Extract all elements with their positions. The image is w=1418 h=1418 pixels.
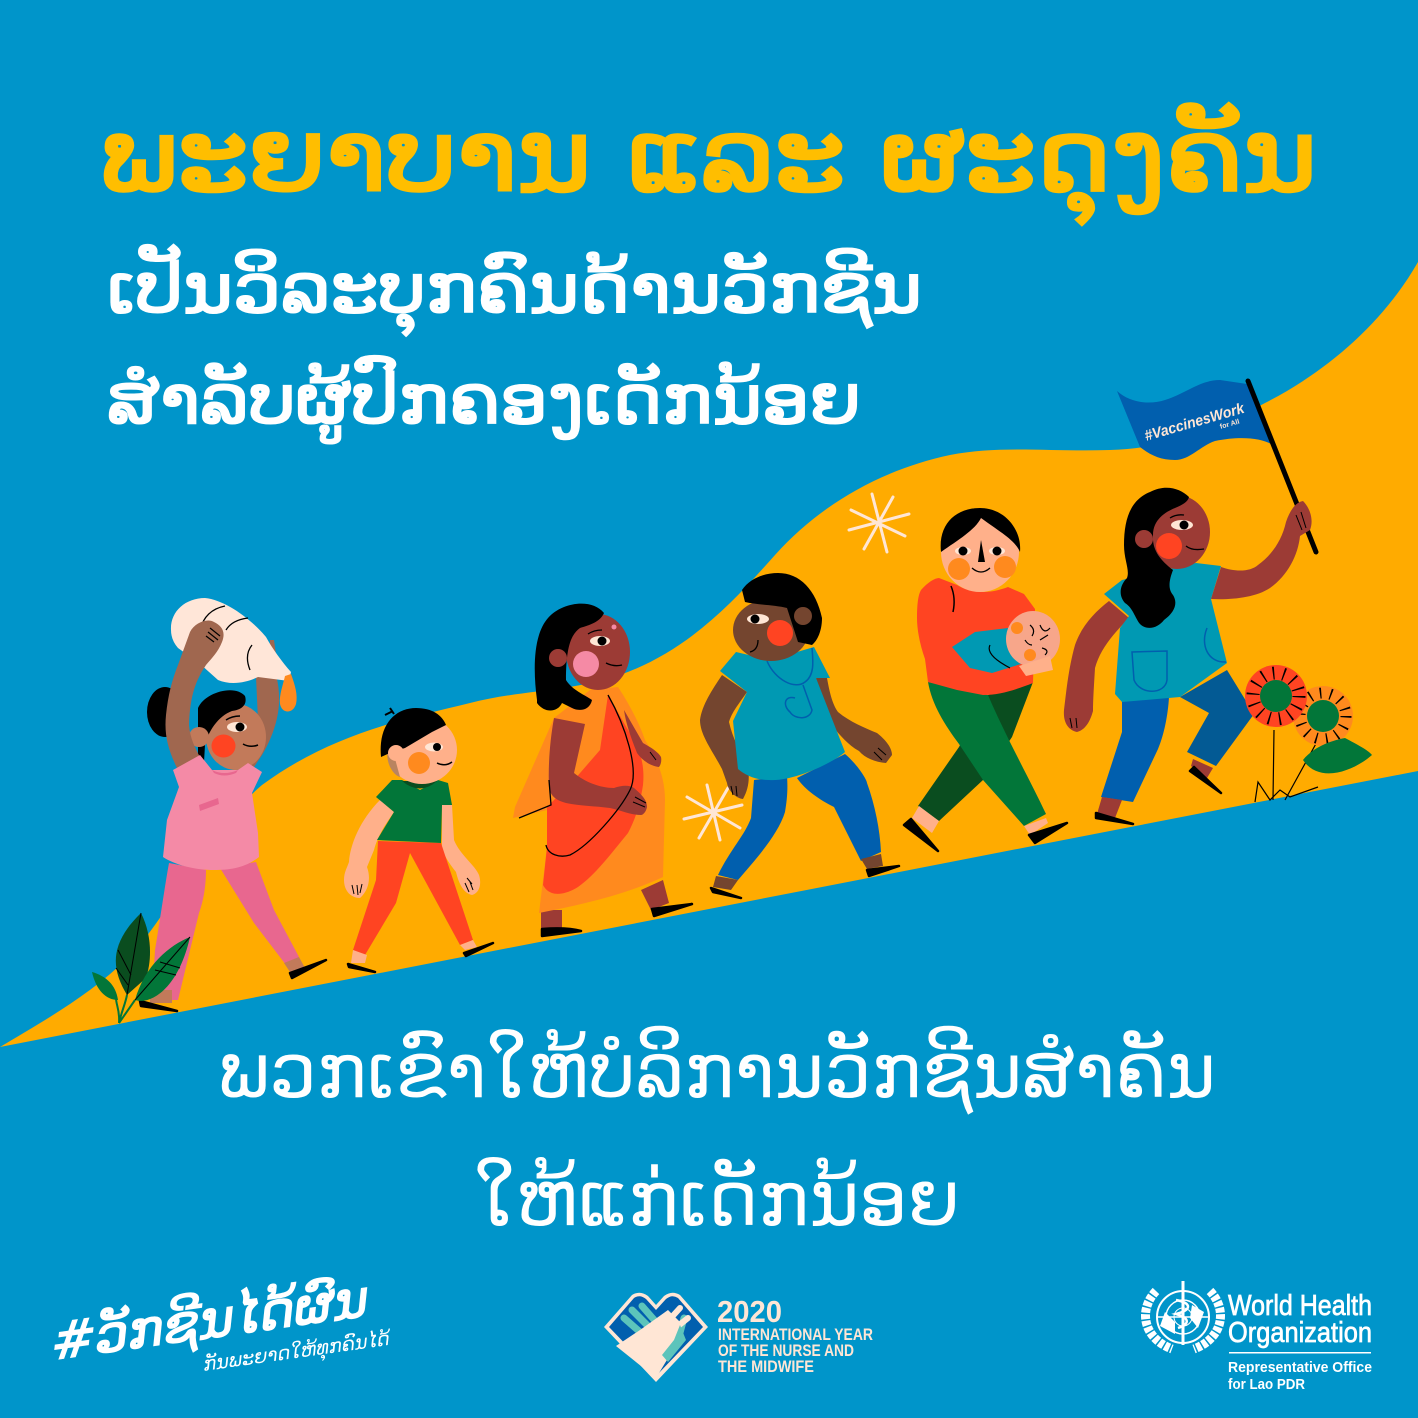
bottle: [171, 598, 291, 683]
logo text: OF THE NURSE AND: [718, 1341, 854, 1360]
sparkle: upper: [849, 494, 909, 552]
bottom message: ພວກເຂົາໃຫ້ບໍລິການວັກຊີນສຳຄັນ: [218, 1025, 1216, 1115]
flag pole: [1248, 381, 1316, 552]
stethoscope: [767, 648, 813, 718]
shirt: [720, 647, 845, 780]
pants: [152, 862, 299, 1000]
right arm: [240, 640, 279, 767]
nurse and midwife year logo: [604, 1293, 873, 1382]
shoes: [904, 819, 1067, 851]
logo text: INTERNATIONAL YEAR: [718, 1325, 873, 1344]
logo text: 2020: [717, 1294, 782, 1329]
orange flower: [1293, 686, 1353, 746]
flag cloth: [1117, 380, 1271, 460]
figure: mother with baby: [904, 508, 1067, 851]
hashtag logo: [49, 1265, 391, 1378]
WHO name: World Health: [1228, 1290, 1372, 1322]
subtitle: ສຳລັບຜູ້ປົກຄອງເດັກນ້ອຍ: [107, 356, 861, 444]
leaf: [1303, 738, 1372, 773]
arms: [1064, 501, 1312, 732]
WHO name: Organization: [1228, 1317, 1372, 1349]
head: [941, 512, 1019, 592]
arms: [344, 800, 480, 898]
office line: for Lao PDR: [1228, 1376, 1305, 1393]
figure: nurse with flag: [1064, 488, 1312, 824]
shoes: [711, 866, 899, 898]
title: ພະຍາບານ ແລະ ຜະດຸງຄັນ: [100, 100, 1317, 225]
sweater: [917, 578, 1035, 695]
baby head: [1006, 611, 1060, 667]
pockets: [1132, 628, 1226, 691]
shoes: [1096, 767, 1221, 824]
tagline: ກັນພະຍາດໃຫ້ທຸກຄົນໄດ້: [202, 1327, 391, 1378]
WHO logo: [1145, 1281, 1372, 1393]
plant: leaves: [92, 913, 190, 1023]
head and hair: [566, 614, 630, 690]
flag with pole: [1117, 380, 1316, 552]
back leg: [918, 682, 1033, 821]
shoes: [348, 943, 493, 972]
heart icon: [604, 1293, 708, 1382]
head: [206, 704, 266, 770]
shoes: [140, 960, 326, 1011]
sparkle: lower: [684, 785, 742, 840]
hashtag: #ວັກຊີນໄດ້ຜົນ: [49, 1265, 372, 1372]
head: [387, 716, 457, 784]
rear leg: [1180, 670, 1254, 766]
logo text: [717, 1294, 873, 1376]
left arm raised: [166, 620, 224, 770]
sari: [513, 687, 665, 913]
arms: [549, 710, 661, 815]
baby blanket: [952, 628, 1024, 673]
logo text: THE MIDWIFE: [718, 1357, 814, 1376]
head: [733, 599, 809, 661]
WHO name: [1228, 1290, 1372, 1349]
head: [1144, 495, 1210, 569]
shirt: [1104, 563, 1227, 702]
bottom message: [218, 1025, 1216, 1243]
trousers: [718, 754, 881, 880]
hair bun: [147, 687, 183, 737]
arms: [700, 675, 892, 799]
red flower: [1245, 665, 1307, 727]
flag text: for All: [1219, 419, 1240, 431]
legs and shoes: [541, 880, 669, 930]
office line: [1228, 1359, 1372, 1393]
office line: Representative Office: [1228, 1359, 1372, 1376]
stems: [1255, 730, 1318, 802]
front leg: [1101, 697, 1169, 802]
subtitle: ເປັນວິລະບຸກຄົນດ້ານວັກຊີນ: [107, 245, 922, 336]
t-shirt: [376, 780, 452, 843]
trousers: [353, 841, 473, 955]
flag text: #VaccinesWork: [1142, 400, 1247, 445]
orange drop: [280, 674, 297, 712]
yellow hill band: [0, 262, 1418, 1047]
front leg: [928, 682, 1046, 826]
flowers: [1245, 665, 1372, 802]
WHO emblem: [1145, 1281, 1221, 1349]
shirt: [163, 755, 262, 870]
mother's hand: [1019, 656, 1053, 676]
subtitle: [107, 245, 922, 444]
bottom message: ໃຫ້ແກ່ເດັກນ້ອຍ: [474, 1154, 960, 1243]
figure: nurse with stethoscope: [700, 573, 899, 898]
sari outline: [519, 695, 633, 856]
figure: boy: [344, 708, 493, 972]
figure: woman pouring bottle: [140, 598, 326, 1011]
figure: woman in sari: [513, 604, 692, 936]
